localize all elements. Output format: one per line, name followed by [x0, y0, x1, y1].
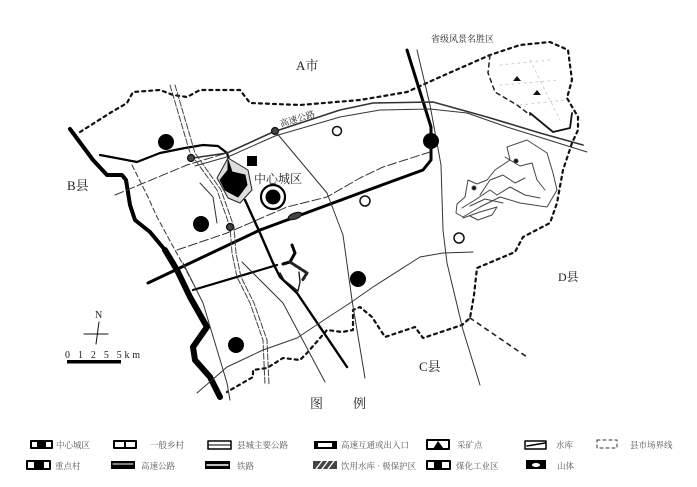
- road: south-west line: [193, 265, 277, 290]
- mining site: black square: [247, 156, 257, 166]
- central city symbol: [261, 185, 285, 209]
- scenic area: [488, 55, 572, 132]
- label: B county: B县: [67, 178, 89, 193]
- legend: key town: [27, 461, 81, 471]
- legend: reservoir: [525, 440, 574, 450]
- county boundary: dotted: [80, 42, 578, 392]
- legend: county trunk road: 县城主要公路: [237, 440, 289, 450]
- legend: expressway entrance: 高速互通或出入口: [341, 440, 409, 450]
- legend title: [310, 396, 366, 411]
- legend: ordinary town: 一般乡村: [150, 440, 185, 450]
- label: D county: D县: [558, 270, 579, 284]
- legend: mining site: [427, 440, 483, 450]
- highway north-south: double dashed: [170, 85, 269, 385]
- north arrow: N: [95, 310, 102, 321]
- expressway: double line: [193, 102, 587, 166]
- legend: mountain: [526, 460, 575, 471]
- label: central city: 中心城区: [254, 171, 302, 186]
- label: scenic area: 省级风景名胜区: [431, 33, 494, 44]
- panel: map: [70, 42, 587, 400]
- legend: reservoir protection area: 饮用水库 · 极保护区: [341, 461, 417, 471]
- label: expressway: 高速公路: [278, 108, 316, 129]
- scale bar: 0 1 2 5 5km: [65, 350, 140, 361]
- river: thick black: [70, 129, 165, 250]
- legend: expressway: 高速公路: [141, 461, 176, 471]
- ordinary towns: hollow circles: [332, 126, 464, 243]
- legend: city boundary: [597, 440, 673, 450]
- legend: city boundary: 县市场界线: [630, 440, 673, 450]
- legend: railway: [205, 461, 255, 471]
- railway: main thick line: [148, 50, 431, 283]
- legend: central city: [31, 440, 91, 450]
- mountain contours: [456, 140, 557, 220]
- legend: ordinary town: [114, 440, 185, 450]
- legend: expressway: [111, 461, 176, 471]
- legend: central city: 中心城区: [56, 440, 91, 450]
- road: northern thick line: [100, 145, 230, 163]
- interchange markers: [188, 128, 303, 230]
- legend: coal chemical zone: [427, 461, 499, 471]
- legend: [27, 440, 673, 471]
- boundary: C and D counties: [470, 318, 527, 357]
- legend: key town: 重点村: [55, 461, 81, 471]
- road: central thick line: [245, 200, 347, 367]
- key towns: black circles: [158, 133, 439, 353]
- legend: mining site: 采矿点: [457, 440, 483, 450]
- label: C county: C县: [419, 359, 441, 374]
- legend title: 例: [353, 396, 366, 411]
- legend title: 图: [310, 396, 323, 411]
- legend: coal chemical zone: 煤化工业区: [456, 461, 499, 471]
- legend: reservoir: 水库: [556, 440, 574, 450]
- legend: railway: 铁路: [237, 461, 255, 471]
- label: A city: A市: [296, 58, 318, 73]
- county roads: thin lines: [115, 50, 480, 400]
- reservoir: [283, 245, 295, 264]
- legend: county trunk road: [208, 440, 289, 450]
- legend: mountain: 山体: [557, 461, 575, 471]
- central city area: hatched: [217, 158, 252, 203]
- north arrow: [84, 310, 108, 344]
